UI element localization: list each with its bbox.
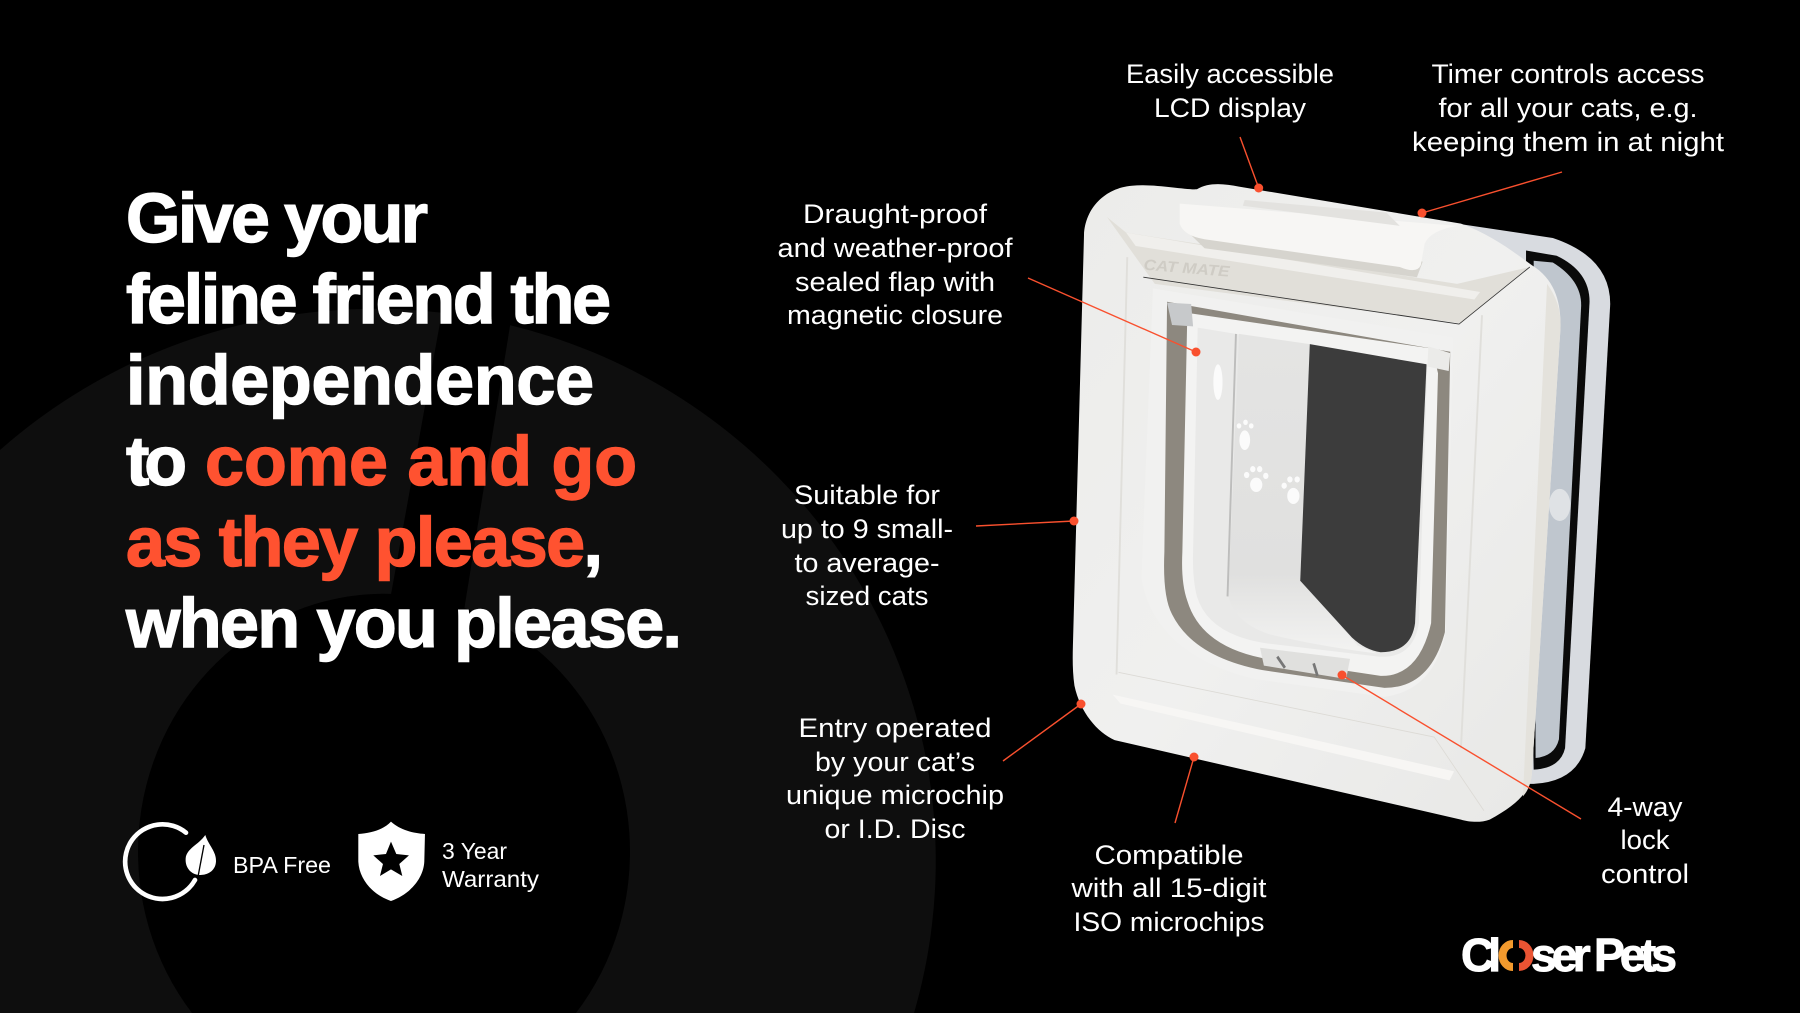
label: timer: keeping them in at night	[1412, 127, 1725, 157]
label: compatible: ISO microchips	[1074, 907, 1264, 937]
latch screw	[1549, 489, 1570, 521]
label: entry	[786, 713, 1004, 844]
leader lines and dots	[976, 137, 1581, 823]
badge: BPA Free: BPA Free	[233, 852, 331, 878]
flap surround	[1141, 288, 1453, 697]
callout line: LCD	[1240, 137, 1263, 192]
background: dark logo ring	[0, 295, 936, 1013]
product: cat flap	[1073, 184, 1610, 822]
headline: to	[126, 422, 187, 500]
callout line: microchip entry	[1003, 700, 1086, 761]
label: compatible: Compatible	[1094, 840, 1244, 870]
label: suitable	[781, 480, 953, 611]
label: lock: lock	[1620, 825, 1670, 855]
callout line: sealed flap	[1028, 278, 1200, 356]
badge: BPA Free	[125, 824, 331, 899]
handle	[1180, 204, 1457, 270]
callout line: timer	[1418, 172, 1562, 218]
label: timer: for all your cats, e.g.	[1438, 93, 1698, 123]
dark window	[1300, 344, 1427, 652]
callout line: ISO	[1175, 752, 1198, 823]
lock dial	[1260, 648, 1350, 679]
headline: come and go	[205, 422, 637, 500]
label: draught-proof: Draught-proof	[803, 199, 988, 229]
top hinge corner	[1167, 303, 1193, 326]
label: compatible: with all 15-digit	[1070, 873, 1267, 903]
label: lock: 4-way	[1608, 792, 1683, 822]
label: lock: control	[1601, 859, 1689, 889]
label: entry: Entry operated	[798, 713, 992, 743]
side ribs	[1117, 257, 1482, 748]
headline	[125, 179, 682, 662]
badge: 3 Year Warranty: Warranty	[442, 866, 540, 892]
icon: ring with leaf	[125, 824, 216, 899]
label: suitable: to average-	[794, 548, 940, 578]
label: timer	[1412, 59, 1725, 157]
label: suitable: Suitable for	[794, 480, 940, 510]
handle shadow	[1182, 226, 1423, 277]
headline: feline friend the	[126, 260, 611, 338]
callout line: lock	[1338, 670, 1581, 819]
right bevel	[1523, 284, 1561, 796]
paw prints	[1213, 364, 1300, 504]
inner blue-grey panel	[1534, 261, 1581, 758]
label: CAT MATE: CAT MATE	[1143, 256, 1231, 280]
label: draught-proof: sealed flap with	[795, 267, 995, 297]
bottom rib	[1113, 695, 1454, 780]
clear flap rim	[1182, 313, 1438, 676]
label: LCD display	[1126, 59, 1334, 123]
logo: Closer Pets: Cl	[1461, 929, 1501, 981]
black gasket	[1526, 250, 1590, 770]
back frame	[1457, 224, 1610, 784]
badge: 3 Year Warranty	[358, 822, 540, 901]
label: timer: Timer controls access	[1432, 59, 1704, 89]
LCD window	[1243, 200, 1400, 226]
logo ring	[1503, 944, 1529, 967]
label: entry: by your cat’s	[815, 747, 975, 777]
top band	[1107, 217, 1530, 323]
label: LCD display: Easily accessible	[1126, 59, 1334, 89]
label: lock	[1601, 792, 1689, 889]
icon: shield with star	[358, 822, 425, 901]
main body	[1073, 184, 1561, 822]
label: draught-proof: and weather-proof	[778, 233, 1013, 263]
label: entry: or I.D. Disc	[824, 814, 966, 844]
label: draught-proof: magnetic closure	[787, 300, 1003, 330]
label: compatible	[1070, 840, 1267, 937]
label: suitable: up to 9 small-	[781, 514, 953, 544]
headline: independence	[126, 341, 594, 419]
headline: when you please.	[125, 584, 682, 662]
label: suitable: sized cats	[806, 581, 928, 611]
label: entry: unique microchip	[786, 780, 1004, 810]
headline: as they please,	[126, 503, 603, 581]
headline: Give your	[126, 179, 428, 257]
label: draught-proof	[778, 199, 1013, 330]
seal ring	[1164, 302, 1450, 688]
clear flap	[1193, 328, 1427, 657]
label: LCD display: LCD display	[1154, 93, 1307, 123]
badge: 3 Year Warranty: 3 Year	[442, 838, 507, 864]
inner flap panel	[1228, 334, 1377, 654]
logo: Closer Pets: ser Pets	[1531, 929, 1677, 981]
logo: Closer Pets	[1461, 929, 1677, 981]
callout line: cats	[976, 516, 1078, 526]
rib	[1126, 233, 1480, 300]
